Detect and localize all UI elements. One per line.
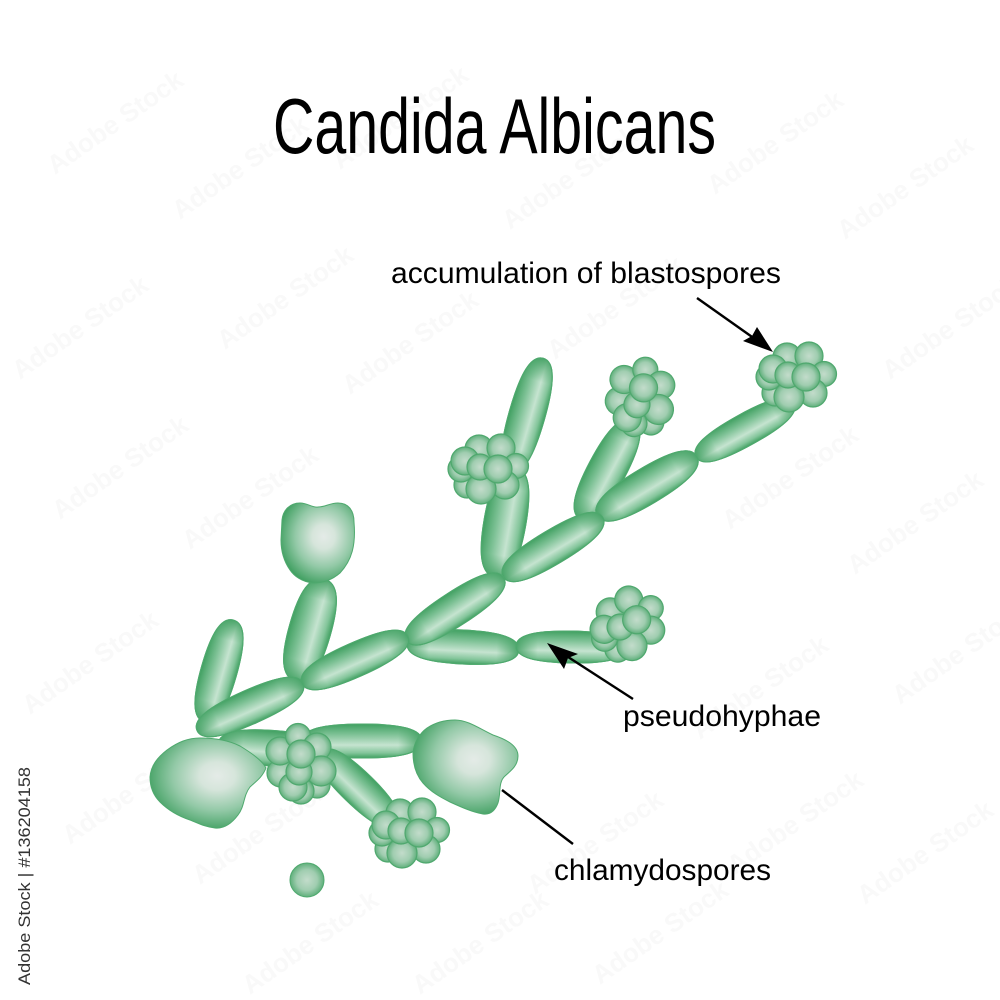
- stock watermark: Adobe Stock: [176, 439, 324, 555]
- stock watermark: Adobe Stock: [851, 794, 999, 910]
- stock watermark: Adobe Stock: [236, 884, 384, 1000]
- stock watermark: Adobe Stock: [6, 269, 154, 385]
- stock watermark: Adobe Stock: [496, 119, 644, 235]
- branch: far left hypha: [187, 615, 251, 727]
- stock watermark: Adobe Stock: [586, 874, 734, 990]
- label: pseudohyphae: pseudohyphae: [623, 700, 821, 733]
- label: chlamydospores: chlamydospores: [554, 854, 771, 887]
- arrow: to pseudohyphae: [547, 643, 633, 699]
- stock watermark: Adobe Stock: [56, 734, 204, 850]
- branch: hypha to upper cluster: [564, 412, 650, 528]
- stock watermark: Adobe Stock: [831, 129, 979, 245]
- stock watermark: Adobe Stock: [406, 884, 554, 1000]
- blastospore cluster: bottom: [369, 798, 450, 868]
- stock watermark: Adobe Stock: [541, 249, 689, 365]
- blastospore cluster: upper centre: [597, 349, 685, 445]
- lower branch segments: [217, 726, 343, 772]
- chlamydospore: right, labelled: [413, 720, 518, 814]
- stock watermark: Adobe Stock: [686, 629, 834, 745]
- stock watermark: Adobe Stock: [716, 419, 864, 535]
- branch: hypha under central cluster: [475, 463, 535, 581]
- stock watermark: Adobe Stock: [186, 774, 334, 890]
- stock watermark: Adobe Stock: [211, 239, 359, 355]
- stock watermark: Adobe Stock: [521, 784, 669, 900]
- line: to chlamydospore: [502, 790, 573, 844]
- pseudohypha: main stem segments: [688, 389, 802, 471]
- chlamydospore: top: [281, 503, 354, 583]
- stock watermark: Adobe Stock: [336, 284, 484, 400]
- pseudohypha: lower middle segments: [406, 627, 520, 667]
- stock watermark: Adobe Stock: [326, 59, 474, 175]
- stock watermark: Adobe Stock: [841, 464, 989, 580]
- stock watermark: Adobe Stock: [701, 84, 849, 200]
- stock watermark: Adobe Stock: [721, 764, 869, 880]
- stock watermark: Adobe Stock: [166, 109, 314, 225]
- branch: hypha to upper chlamydospore: [275, 573, 345, 687]
- label: accumulation of blastospores: accumulation of blastospores: [391, 257, 781, 290]
- side credit text: Adobe Stock | #136204158: [15, 767, 34, 985]
- stock watermark: Adobe Stock: [16, 604, 164, 720]
- blastospore cluster: top right: [756, 342, 836, 412]
- title: Candida Albicans: [273, 82, 716, 170]
- stock watermark: Adobe Stock: [46, 409, 194, 525]
- stock watermark: Adobe Stock: [41, 64, 189, 180]
- blastospore cluster: central: [448, 434, 528, 504]
- blastospore cluster: right of pseudohyphae: [576, 574, 681, 675]
- branch: tall top hypha: [493, 353, 561, 477]
- arrow: to blastospores: [697, 298, 773, 352]
- single spore: [290, 863, 324, 897]
- blastospore cluster: lower left: [266, 724, 336, 804]
- chlamydospore: left: [150, 738, 266, 828]
- organism illustration: [150, 342, 836, 897]
